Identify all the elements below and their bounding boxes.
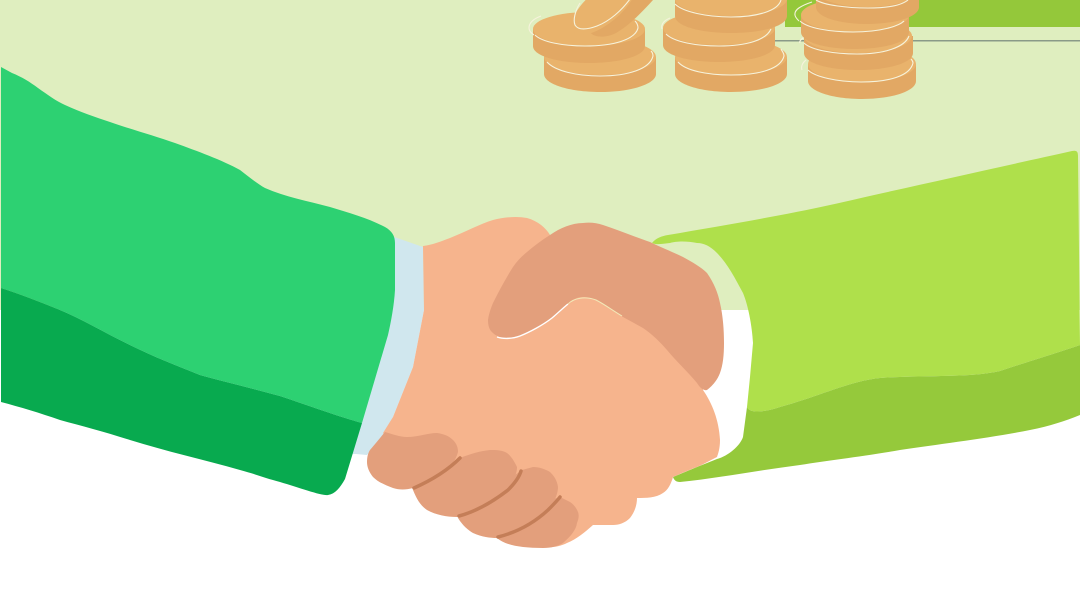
- left sleeve: light part: [1, 67, 395, 423]
- finger crease 2: [459, 471, 521, 516]
- finger crease 1: [414, 458, 460, 488]
- left shirt cuff: [340, 232, 424, 455]
- right shirt cuff: [700, 310, 753, 460]
- coin: right centre: [800, 19, 913, 70]
- hand: left light skin: [383, 217, 720, 547]
- grey horizontal line: [775, 40, 1080, 42]
- dark green top bar: [785, 0, 1080, 27]
- hand: right dark skin: [488, 223, 724, 390]
- fingers: [367, 432, 579, 548]
- finger crease 3: [498, 497, 560, 537]
- finger 2: [413, 450, 517, 517]
- coin: left upper: [529, 12, 645, 63]
- right sleeve: dark part: [673, 345, 1080, 482]
- coin stack: middle: [662, 0, 787, 92]
- highlight: white section: [497, 304, 568, 338]
- coin stack: left: [529, 0, 656, 92]
- coin stack: right: [795, 0, 919, 99]
- coin: right upper: [795, 0, 909, 49]
- coin: falling: [562, 0, 653, 45]
- highlight: pale section: [568, 298, 622, 316]
- right sleeve: light part: [652, 151, 1080, 412]
- right sleeve: [652, 151, 1080, 482]
- left sleeve: dark part: [1, 288, 362, 495]
- coin: right top: [815, 0, 919, 24]
- coin: middle bottom: [675, 39, 787, 92]
- coin: middle top: [675, 0, 787, 33]
- coin: left bottom: [544, 39, 656, 92]
- finger 1: [367, 432, 458, 490]
- left sleeve: [1, 67, 395, 495]
- light green background panel: [0, 0, 1080, 310]
- coin: middle centre: [662, 11, 775, 62]
- finger 3: [458, 467, 558, 538]
- finger 4: [497, 497, 579, 548]
- highlight between hands: [497, 298, 622, 338]
- coin: right bottom: [802, 46, 916, 99]
